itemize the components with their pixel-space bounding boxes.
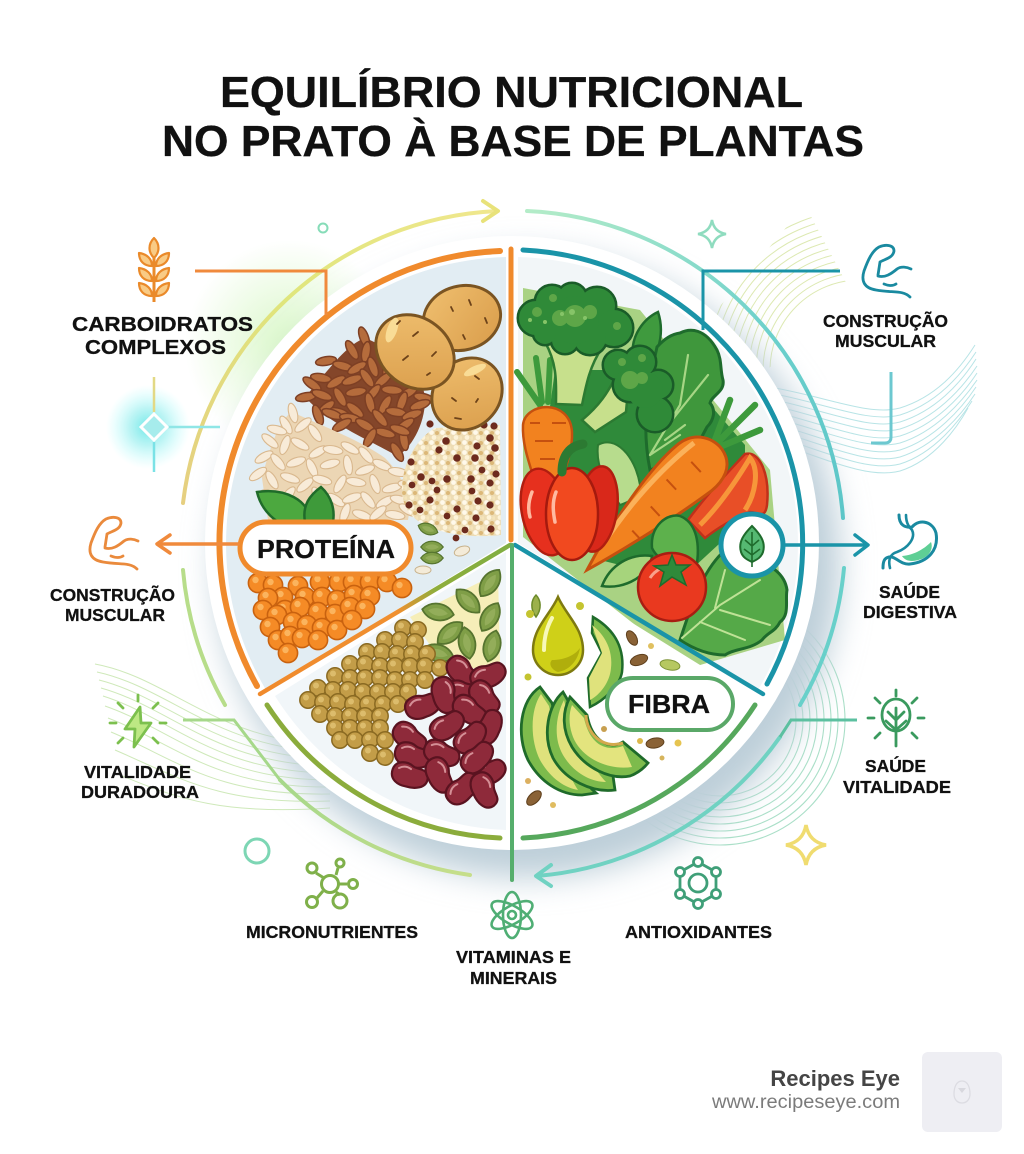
tomato	[638, 553, 706, 621]
label: construção muscular left: CONSTRUÇÃO	[50, 584, 175, 605]
label: vitaminas e minerais	[456, 947, 571, 988]
bell pepper	[513, 444, 623, 560]
arrow: upper left ring	[183, 201, 498, 503]
arc: left ring	[183, 570, 225, 705]
divider: bottom	[510, 545, 514, 880]
label: vitalidade duradoura: VITALIDADE	[84, 762, 191, 782]
label: saúde digestiva: SAÚDE	[879, 581, 940, 602]
callout: fibra pill	[607, 678, 733, 730]
broccoli stem two	[582, 378, 628, 432]
lettuce lower right	[680, 553, 787, 655]
dark foliage	[540, 370, 745, 580]
footer brand	[711, 1066, 900, 1113]
icon: muscle right	[863, 245, 911, 297]
label: saúde vitalidade: SAÚDE	[865, 755, 926, 776]
icon: atom	[488, 892, 536, 938]
icon: lightning bolt	[110, 695, 166, 747]
arrow: leaf to digestive health	[785, 535, 868, 555]
arrow: upper right ring	[527, 211, 843, 518]
kidney beans	[388, 651, 510, 812]
broccoli stem one	[545, 342, 602, 405]
label: saúde vitalidade	[843, 755, 951, 797]
arc: orange	[219, 251, 500, 686]
pumpkin seeds	[420, 565, 506, 665]
label: vitalidade duradoura	[81, 762, 199, 802]
broccoli crown one	[518, 283, 633, 355]
connector: muscle small	[871, 372, 891, 443]
slice one	[521, 687, 596, 795]
label: micronutrientes: MICRONUTRIENTES	[246, 922, 418, 942]
large spinach leaf	[646, 330, 723, 470]
arrow: lower right ring	[536, 737, 780, 886]
label: construção muscular right: CONSTRUÇÃO	[823, 310, 948, 331]
label: saúde digestiva: DIGESTIVA	[863, 602, 957, 622]
small seeds	[415, 520, 471, 574]
decorative sparkles and circles	[141, 220, 826, 865]
carrot tops left	[517, 358, 550, 405]
callout: proteína pill	[240, 522, 411, 574]
arc: right ring	[800, 568, 844, 705]
label: carboidratos complexos: COMPLEXOS	[85, 337, 226, 359]
label: vitaminas e minerais: VITAMINAS E	[456, 947, 571, 967]
connector lines	[183, 271, 891, 780]
connector: lasting vitality	[183, 720, 280, 780]
left carrot	[523, 407, 572, 490]
panel: fibre and fats sector	[518, 552, 750, 830]
label: carboidratos complexos	[72, 314, 253, 359]
small green leaves	[602, 516, 698, 587]
divider: top	[508, 249, 514, 540]
arc: lower left ring	[280, 780, 470, 875]
arcs and dividers of the plate	[219, 249, 803, 880]
panel: legumes sector	[275, 552, 510, 830]
label: construção muscular right: MUSCULAR	[835, 331, 936, 351]
divider: lower left	[260, 545, 510, 694]
title	[162, 67, 864, 166]
avocado slices	[521, 687, 648, 795]
connector: carbohydrates	[195, 271, 326, 315]
small avocado slice	[588, 617, 622, 707]
arrow: protein to muscle	[157, 535, 238, 553]
broccoli crown two	[603, 346, 673, 432]
footer brand: www.recipeseye.com	[711, 1092, 900, 1113]
icon: leaf medallion	[721, 514, 783, 576]
arc: olive	[267, 705, 500, 838]
connector: muscle right	[703, 271, 840, 330]
slice three	[564, 697, 648, 777]
seed backdrop	[410, 573, 500, 673]
label: vitaminas e minerais: MINERAIS	[470, 968, 557, 988]
callout: proteína pill: PROTEÍNA	[257, 534, 395, 564]
label: saúde digestiva	[863, 581, 957, 622]
basil leaves	[257, 487, 334, 522]
label: saúde vitalidade: VITALIDADE	[843, 777, 951, 797]
background glow and wave decorations	[95, 210, 1020, 845]
scattered seeds and drops	[524, 595, 682, 808]
brown rice	[295, 326, 435, 463]
icon: tree vitality	[868, 690, 924, 746]
label: construção muscular right	[823, 310, 948, 351]
footer brand: Recipes Eye	[770, 1066, 900, 1091]
large carrot	[566, 424, 738, 590]
icon: muscle left	[90, 517, 138, 569]
plate shadow	[216, 254, 840, 878]
olive oil drop	[533, 597, 583, 675]
footer logo tile	[922, 1052, 1002, 1132]
label: carboidratos complexos: CARBOIDRATOS	[72, 314, 253, 336]
green backdrop	[523, 288, 785, 668]
title: EQUILÍBRIO NUTRICIONAL	[220, 67, 803, 117]
white rice	[247, 402, 419, 524]
callout: fibra pill: FIBRA	[628, 689, 710, 719]
label: antioxidantes: ANTIOXIDANTES	[625, 922, 772, 942]
connector: health vitality	[780, 720, 857, 737]
panel: vegetables sector	[513, 257, 798, 690]
outer ring arrows	[183, 201, 844, 886]
orange lentils	[248, 572, 412, 663]
label: construção muscular left	[50, 584, 175, 625]
carrot fronds	[715, 400, 760, 446]
title: NO PRATO À BASE DE PLANTAS	[162, 116, 864, 166]
icon: wheat	[139, 238, 169, 302]
pale lettuce	[598, 442, 640, 505]
panel: carbohydrates sector	[226, 257, 517, 690]
green lentils	[300, 620, 448, 765]
arc: green	[523, 705, 755, 838]
orange pepper slice	[688, 454, 768, 538]
small spinach leaf	[633, 312, 661, 362]
potatoes	[361, 277, 517, 444]
icon: molecule	[306, 859, 358, 908]
plate	[205, 236, 819, 850]
icon: antioxidant ring	[676, 858, 720, 908]
icon: stomach	[883, 515, 936, 568]
arc: blue	[523, 250, 803, 684]
quinoa	[402, 420, 501, 541]
divider: lower right	[515, 545, 763, 694]
label: construção muscular left: MUSCULAR	[65, 605, 165, 625]
label: vitalidade duradoura: DURADOURA	[81, 782, 199, 802]
slice two	[547, 692, 615, 790]
